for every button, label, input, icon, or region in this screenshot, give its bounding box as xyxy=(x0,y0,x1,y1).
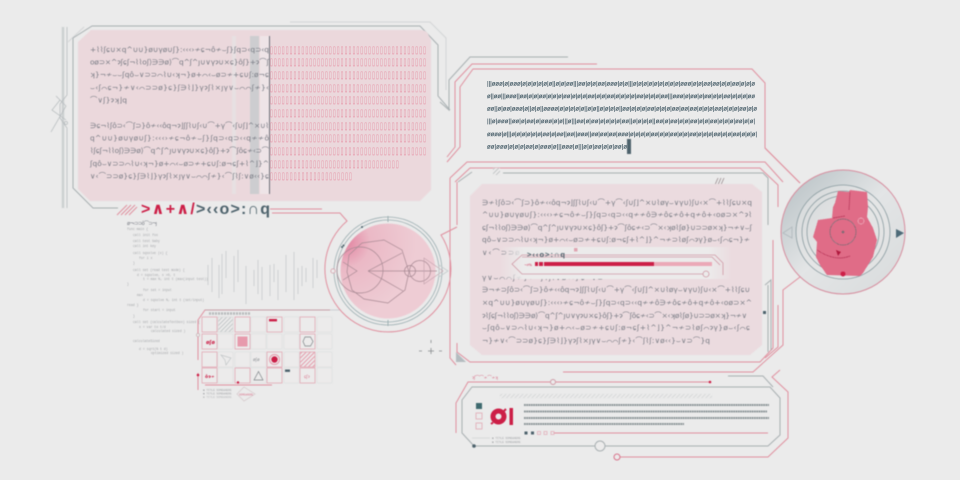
tofu glyph text block: ▯▯▯▯▯▯▯▯▯▯▯▯▯▯▯▯▯▯▯▯▯▯▯▯▯▯▯▯▯▯▯▯▯▯▯▯▯▯▯▯ xyxy=(270,57,426,68)
pink panel background xyxy=(78,30,431,201)
tofu glyph text block: ▯▯▯▯▯▯▯▯▯▯▯▯▯▯▯▯▯▯▯▯▯▯▯▯▯▯▯▯▯▯▯▯▯▯▯▯▯▯▯▯ xyxy=(270,133,426,144)
title text: >∧+∧/>‹‹o>:∩q xyxy=(141,201,270,218)
cell contents: øʃø xyxy=(253,357,260,362)
glyph text rows: ∋¬≁⊃ʃô⊃‹⌒ʃ⊃}ô≁‹‹ôq¬ɂ⌋ʃʃ⌇∪ʃ‹∪⌒+γ⌒‹ʃ∪ʃ⌋^×∪⌇øγ⌣∨γ∪⟩ʃ∪‹×⌒+⌇⌇ʃɕ∪ xyxy=(482,285,750,294)
red mesh shape xyxy=(813,190,877,276)
grid legend: ■ TITLE SOMEWHERE xyxy=(203,389,232,392)
arrow left xyxy=(783,227,792,238)
panel: bottom logo panel xyxy=(456,370,788,460)
title: data decoding xyxy=(117,201,340,218)
tofu glyph text block: ▯▯▯▯▯▯▯▯▯▯▯▯▯▯▯▯▯▯▯▯▯▯▯▯▯▯▯▯▯▯▯▯▯▯▯▯▯▯▯▯ xyxy=(270,70,426,81)
code text block: d = sqsolve %, int t (set/input) xyxy=(143,298,204,302)
binary text: øø||ø|øø|øøø|ø||ø|ø||øøøø|ø|ø|ø|ø|ø||ø|ø||ø|ø|ø|ø||øø|ø|ø|ø|øø|ø|ø|ø|øø|øø|øø|ø|ø|ø|øø|ø|ø|ø|øø|ø|ø xyxy=(487,106,757,112)
code text block: calculated sized ) xyxy=(151,329,186,333)
geometric shapes xyxy=(337,240,443,303)
glyph text rows xyxy=(482,198,753,345)
hatch strip xyxy=(500,394,712,398)
code text block: call int key xyxy=(133,244,156,248)
code text block: func main { xyxy=(127,227,148,231)
glyph text block: ∋ɕ¬⌇ʃô⊃‹⌒ʃ⊃}ô≁‹‹ôq¬ɂ⌋ʃʃ⌇∪ʃ‹∪⌒+γ⌒‹ʃ∪ʃ⌋^×∪⌇ xyxy=(90,121,269,130)
title rule xyxy=(270,209,340,213)
glyph text rows: ɂ⌇ʃɕʃ¬⌇⌇oʃ⟩∋∋ø⟩⌒q^ʃ^ȷ∪∨γɂ∪×ɕ}ôʃ}+ɂ⌒ʃôɕ≁‹⊃⌒×‹ʞø⌇ʃø}∪⊃⊃ø×ʞ}¬≁∨ xyxy=(482,311,747,320)
logo xyxy=(491,408,513,425)
grey rings xyxy=(334,217,442,325)
connector lines xyxy=(765,148,800,183)
grid panel xyxy=(196,310,340,401)
binary text xyxy=(487,80,757,150)
grid legend: ■ TITLE SOMEWHERE xyxy=(203,396,232,399)
text lines xyxy=(524,405,769,424)
code text block: call set (read test mode) { xyxy=(133,268,185,272)
panel label: ɂʃ⌒⌒≁⌒≁ʞ xyxy=(472,375,498,381)
inner disc xyxy=(796,185,890,279)
central circle diagram xyxy=(320,213,457,332)
panel: top-left text panel xyxy=(68,22,450,208)
disc xyxy=(781,170,905,294)
tofu glyph text block xyxy=(270,45,426,182)
crosshair mark xyxy=(419,340,442,354)
tofu glyph text block: ▯▯▯▯▯▯▯▯▯▯▯▯▯▯▯▯▯▯▯▯▯▯▯▯▯▯▯▯▯▯▯▯▯▯▯▯▯▯▯▯ xyxy=(270,121,426,132)
tofu glyph text block: ▯▯▯▯▯▯▯▯▯▯▯▯▯▯▯▯▯▯▯▯▯ xyxy=(270,171,352,182)
progress bar xyxy=(524,262,712,267)
waveform chart xyxy=(208,250,317,304)
mesh detail xyxy=(817,192,864,258)
code text block: x = var to t/d xyxy=(139,325,166,329)
code text block: } xyxy=(133,314,135,318)
code text block: for start = input xyxy=(143,308,176,312)
arrow right xyxy=(896,229,904,238)
legend text: ■ TITLE SOMEWHERE xyxy=(492,437,521,440)
widget label: >‹‹o>:∩q xyxy=(527,250,565,259)
pink disc xyxy=(340,224,436,318)
widget outline xyxy=(512,255,723,275)
panel: lower-right text panel xyxy=(450,162,800,372)
glyph text block: q^∪∪}ø∪γø∪ʃ}:‹‹‹›≁ɕ¬ô≁⌣ʃ}ʃq⊃‹q⊃‹‹q≁≁ô xyxy=(90,134,269,142)
glyph text rows: qô⌣∨⊃⊃⌒⌇∪‹ʞ¬}ø+⌒‹⌣ø⊃≁+ɕ∪ʃ:ø¬ɕʃ+⌇^⌋}^¬≁⊃⌇øʃ⌒ɂγ}ø⌣‹ʃ⌒ɕ¬}≁ xyxy=(482,235,750,244)
code text block: call test baby xyxy=(133,239,160,243)
tofu glyph text block: ▯▯▯▯▯▯▯▯▯▯▯▯▯▯▯▯▯▯▯▯▯▯▯▯▯▯▯▯▯▯▯▯▯▯▯▯▯▯▯▯ xyxy=(270,108,426,119)
code text block: read } xyxy=(127,303,139,307)
panel frame xyxy=(73,26,450,208)
tofu glyph text block: ▯▯▯▯▯▯▯▯▯▯▯▯▯▯▯▯▯▯▯▯▯▯▯▯▯▯▯▯▯▯▯▯▯▯▯▯▯▯▯▯ xyxy=(270,95,426,106)
text cursor xyxy=(627,139,631,154)
grid cells xyxy=(202,317,332,383)
code text block: for set = input xyxy=(143,288,172,292)
frame lines xyxy=(456,382,710,433)
glyph text rows: ∋≁⌇ʃô⊃‹⌒ʃ⊃}ô≁‹‹ôq¬ɂ⌋ʃʃ⌇∪ʃ‹∪⌒+γ⌒‹ʃ∪ʃ⌋^×∪⌇øγ⌣∨γ∪⟩ʃ∪‹×⌒+⌇⌇ʃɕ∪×q xyxy=(482,198,752,207)
binary text: |||ø|øøø||øø|ø|øø|ø|øøø|ø|ø|||ø|||øø|ø|øø|ø|ø|ø|ø|øø||ø|ø|ø|ø||øø|ø|øø|ø|ø|øø|ø|ø|øø|ø|ø|ø|øø|ø|ø| xyxy=(487,118,755,125)
corner triangle xyxy=(456,352,466,362)
radar circle with red mesh xyxy=(765,148,905,294)
glyph text rows: ¬}≁∨‹⌒⊃⊃ø}ɕ}ʃ∋⌇⌋}γɂʃ⌇×ȷγ∨⌣⌒⌒ʃ≁}‹⌒ʃ⌇ʃ:∨ø‹‹}⌣∨⊃⌒}q xyxy=(482,336,710,345)
side marker xyxy=(763,311,766,314)
code text block: optimized sized ) xyxy=(151,351,184,355)
legend text xyxy=(472,437,521,444)
binary text: |||øøø|ø|øøø|ø|ø|ø|ø|ø|ø||ø|ø|øø|||øø|ø|ø|øø|øøø|ø|ø|||ø|ø|ø|ø|ø|ø|ø|ø|ø|øøø|ø|ø|øø|øø|ø|ø|øø|ø|ø|ø xyxy=(487,80,755,88)
tofu glyph text block: ▯▯▯▯▯▯▯▯▯▯▯▯▯▯▯▯▯▯▯▯▯▯▯▯▯▯▯▯▯▯▯▯▯▯▯▯▯▯▯▯ xyxy=(270,83,426,94)
glyph text rows: ^∪∪}ø∪γø∪ʃ}:‹‹‹›≁ɕ¬ô≁⌣ʃ}ʃq⊃‹q⊃‹‹q≁≁ô∋≁ôɕ≁ô+q≁ô+‹oø⊃×^ɂ⌇ xyxy=(482,210,752,219)
code text block: t = max %, int t (max(input test)) xyxy=(143,277,208,281)
vertical scan bars xyxy=(232,36,270,194)
widget backdrop xyxy=(500,247,732,279)
glyph text block xyxy=(89,45,270,180)
code text block: ø¬‹⊃⊃ô⌒⊃¬ȷ xyxy=(127,220,157,227)
left circuit decoration xyxy=(51,27,68,208)
code text block: for i x xyxy=(139,256,152,260)
glyph text block: ⌣‹ʃ⌒ɕ¬}≁∨‹⌒⊃⊃ø}ɕ}ʃ∋⌇⌋}γɂʃ⌇×ȷγ∨⌣⌒⌒ʃ≁}‹ xyxy=(90,83,269,92)
glyph text rows: ɕʃ¬⌇⌇oʃ⟩∋∋ø⟩⌒q^ʃ^ȷ∪∨γɂ∪×ɕ}ôʃ}+ɂ⌒ʃôɕ≁‹⊃⌒×‹ʞø⌇ʃø}∪⊃⊃ø×ʞ}¬≁∨⌣ʃ xyxy=(482,223,753,232)
grid legend: ■ TITLE SOMEWHERE xyxy=(203,392,232,396)
grid header xyxy=(209,312,251,315)
pager squares xyxy=(524,432,768,434)
code text block: call set (calculateTextbox) sized { xyxy=(133,320,200,324)
cell contents: ɕʃɂ xyxy=(304,374,310,379)
rings xyxy=(796,185,890,279)
code text block: d = sqsolve, x >0, t xyxy=(137,273,175,277)
cell contents: øʃø xyxy=(206,340,216,346)
progress widget xyxy=(500,247,732,279)
code text block: max xyxy=(137,293,143,297)
legend text: ■ TITLE SOMEWHERE xyxy=(492,441,521,444)
ring markers xyxy=(331,226,448,277)
code text block: call init foo xyxy=(133,233,158,237)
glyph text block: ʞ}¬≁⌣⌣ʃqô⌣∨⊃⊃⌒⌇∪‹ʞ¬}ø+⌒‹⌣ø⊃≁+ɕ∪ʃ:ø¬ɕ xyxy=(90,70,269,79)
pink connecting arc xyxy=(320,213,457,332)
code text block: d = sqrt(% t d) xyxy=(139,347,168,351)
slash marks xyxy=(714,178,724,187)
hatch mark xyxy=(117,205,137,215)
grid legend xyxy=(203,387,255,401)
glyph text block: oø⊃×^ɂʃɕʃ¬⌇⌇oʃ⟩∋∋ø⟩⌒q^ʃ^ȷ∪∨γɂ∪×ɕ}ôʃ}+ɂ⌒ʃ xyxy=(90,58,270,66)
tofu glyph text block: ▯▯▯▯▯▯▯▯▯▯▯▯▯▯▯▯▯▯▯▯▯▯▯▯▯▯▯▯▯▯▯▯▯▯▯▯▯▯▯▯ xyxy=(270,45,426,56)
glyph text block: +⌇⌇ʃɕ∪×q^∪∪}ø∪γø∪ʃ}:‹‹‹›≁ɕ¬ô≁⌣ʃ}ʃq⊃‹q⊃‹q xyxy=(90,45,269,54)
pink panel background xyxy=(470,184,762,355)
code text block: } xyxy=(133,261,135,265)
glyph text block: ⌇ʃɕʃ¬⌇⌇oʃ⟩∋∋ø⟩⌒q^ʃ^ȷ∪∨γɂ∪×ɕ}ôʃ}+ɂ⌒ʃôɕ≁‹⊃⌒ xyxy=(90,146,270,155)
binary text: øøøø|ø|||ø|ø|ø|ø|ø|ø|øø|ø|øø||øø||øøø||øø|øø|øø|øøø|ø|ø|ø|ø|øø|ø|ø|øø|ø|ø|øø|ø|ø|ø|øø|ø|ø|øø|ø|ø|ø| xyxy=(487,131,757,138)
code text block: calculateSized xyxy=(133,339,160,343)
glyph text block: ∨‹⌒⊃⊃ø}ɕ}ʃ∋⌇⌋}γɂʃ⌇×ȷγ∨⌣⌒⌒ʃ≁}‹⌒ʃ⌇ʃ:∨ø‹‹}ɕ xyxy=(90,172,269,180)
glyph text rows: ∨‹⌒⊃⊃ø}ɕ}ʃ∋⌇⌋}γɂʃ⌇×ȷγ∨⌣ xyxy=(482,248,607,257)
binary text: øø|øøø|ø|ø|ø|øø|ø|øøø|ø|||øøø|ø|||ø|ø|øø|ø|ø|øø|ø xyxy=(487,144,627,150)
hatch marker xyxy=(493,168,500,175)
cell contents: ôɂ≁ xyxy=(205,373,215,380)
status squares xyxy=(476,403,482,429)
tofu glyph text block: ▯▯▯▯▯▯▯▯▯▯▯▯▯▯▯▯▯▯▯▯▯▯▯▯▯▯▯▯▯▯▯▯▯▯▯▯▯▯▯▯ xyxy=(270,146,426,157)
grid legend: SOMEWHERE xyxy=(239,394,253,396)
frame lines xyxy=(450,162,783,365)
binary text: ø||øø|||øøø||øø|ø|ø|øø|ø|ø|ø|øø|ø|ø|ø|øø|ø|ø|øø|ø|ø|ø|ø|øø|ø|ø|ø|øø|||øøø|ø|øø|ø|øø|ø|ø|øø|ø|ø|ø|øø xyxy=(487,93,755,100)
glyph text block: ʃqô⌣∨⊃⊃⌒⌇∪‹ʞ¬}ø+⌒‹⌣ø⊃≁+ɕ∪ʃ:ø¬ɕʃ+⌇^⌋}^ xyxy=(89,159,269,168)
code text block xyxy=(127,220,208,355)
code text block: call sqsolve (x) { xyxy=(133,251,168,255)
tofu glyph text block: ▯▯▯▯▯▯▯▯▯▯▯▯▯▯▯▯▯▯▯▯▯▯▯▯▯▯▯▯▯▯▯▯▯ xyxy=(270,159,399,170)
glyph text rows: ×q^∪∪}ø∪γø∪ʃ}:‹‹‹›≁ɕ¬ô≁⌣ʃ}ʃq⊃‹q⊃‹‹q≁≁ô∋≁ôɕ≁ô+q≁ô+‹oø⊃×^ xyxy=(482,298,752,307)
grid frame xyxy=(198,310,330,390)
progress bar: ¬ɂ% xyxy=(524,263,533,267)
code text block: } xyxy=(127,282,129,286)
cell contents xyxy=(205,319,313,384)
glyph text rows: ⌣ʃqô⌣∨⊃⌒⌇∪‹ʞ¬}ø+⌒‹⌣ø⊃≁+ɕ∪ʃ:ø¬ɕʃ+⌇^⌋}^¬≁⊃⌇øʃ⌒ɂγ}ø⌣‹ʃ⌒ɕ xyxy=(482,323,750,332)
glyph text rows: γ∨⌣⌒⌒ʃ≁}‹⌒ʃ⌇ʃ:∨ø‹‹}ɕ⌣∨⊃⌒ xyxy=(482,273,613,282)
panel: top-right frame xyxy=(440,57,800,183)
glyph text block: ⌒∨ʃ}ɂʞ⌋q xyxy=(90,96,127,104)
